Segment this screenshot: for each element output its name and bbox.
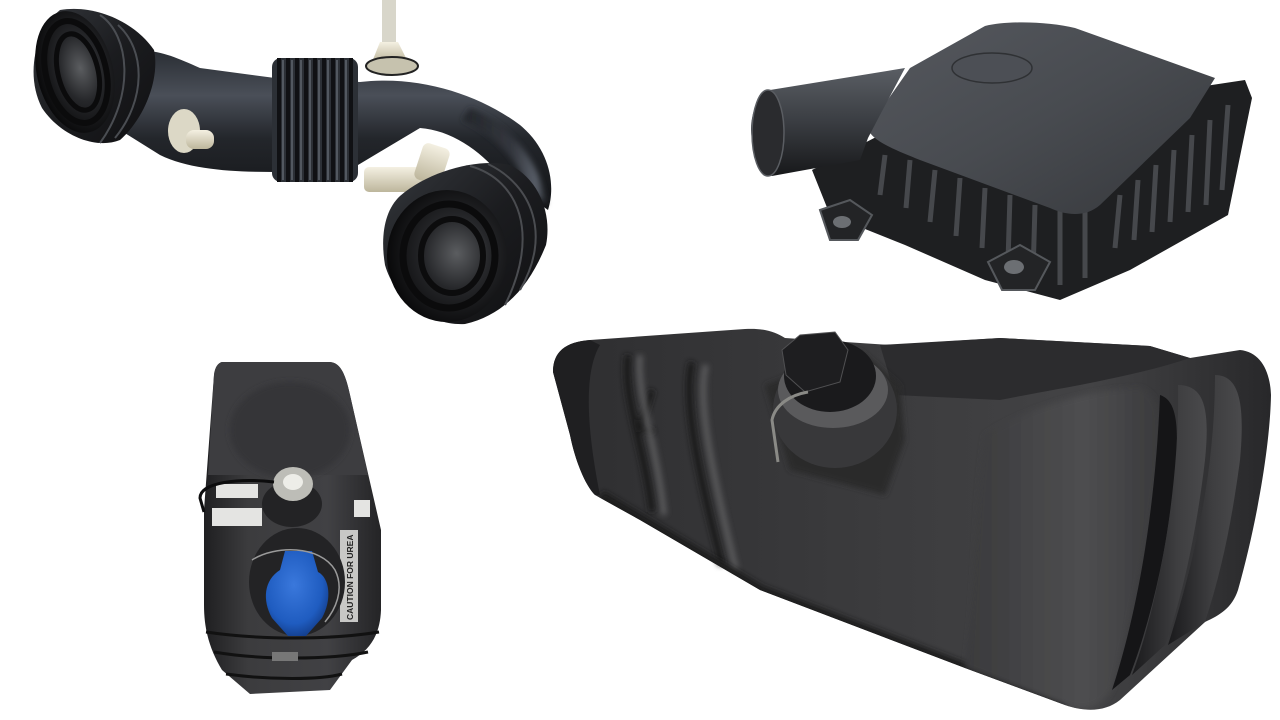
filler recess (765, 350, 905, 495)
bend highlight (462, 108, 547, 205)
side ribs (1112, 395, 1177, 690)
fuel cap (782, 332, 848, 392)
left shaded rib (553, 340, 600, 495)
cream lower connectors (364, 142, 451, 192)
outlet opening (387, 190, 507, 322)
lid circular cap (952, 53, 1032, 83)
bottom steps (206, 632, 379, 678)
product: small urea tank with blue cap (200, 362, 381, 694)
product: air filter housing (751, 22, 1252, 300)
lower edge shadow (600, 497, 1065, 707)
centre bellows (272, 58, 358, 182)
inlet opening (23, 3, 127, 141)
filler recess (249, 528, 345, 636)
white vertical hose and port (366, 0, 418, 75)
caution label (340, 530, 358, 622)
lower housing with fins (812, 80, 1252, 300)
hose loop (200, 481, 274, 512)
soft panel ridges (627, 355, 722, 565)
tank silhouette (553, 329, 1271, 710)
filler neck (773, 352, 897, 468)
cap lanyard (252, 550, 339, 622)
breather neck with grey cap (262, 467, 322, 527)
outlet bellows (383, 163, 548, 324)
top face (208, 362, 368, 475)
product: corrugated air intake duct (23, 0, 551, 324)
tank body (204, 362, 381, 694)
front rounded corner (964, 394, 1116, 710)
embossed circle (230, 382, 350, 478)
fins (880, 105, 1228, 285)
blue cap (266, 551, 328, 636)
caution label: CAUTION FOR UREA (345, 535, 355, 620)
inlet bellows (34, 9, 155, 143)
duct body (120, 51, 551, 210)
top face shading (880, 338, 1190, 400)
mounting lugs (820, 200, 1050, 290)
inlet rib lines (100, 15, 139, 143)
textured lid (868, 22, 1215, 214)
panel highlights (640, 355, 736, 570)
cap lanyard (772, 392, 808, 462)
inlet tube (751, 68, 905, 176)
lug holes (833, 216, 1024, 274)
cream side nipple (168, 109, 214, 153)
white stickers (212, 484, 370, 661)
product: large black fuel tank (553, 329, 1271, 710)
